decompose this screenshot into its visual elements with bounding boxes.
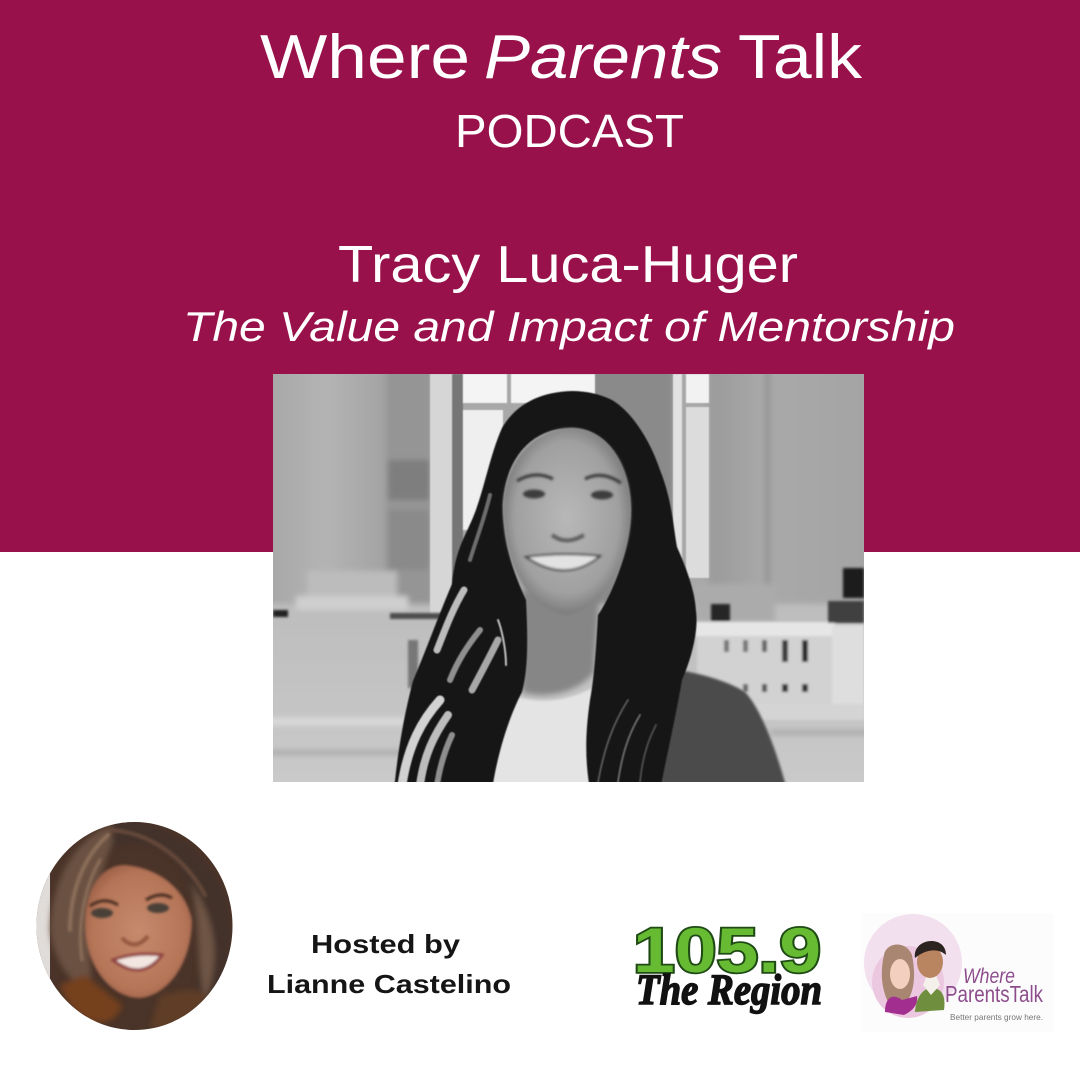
subtitle: PODCAST: PODCAST	[455, 105, 684, 157]
hair	[394, 391, 697, 790]
logo: 105.9 The Region	[633, 916, 822, 1014]
neck	[522, 590, 600, 695]
host face	[85, 865, 192, 998]
logo circles	[864, 914, 962, 1012]
logo woman	[882, 944, 917, 1015]
balustrade	[273, 568, 865, 720]
guest name: Tracy Luca-Huger	[338, 236, 798, 294]
host credit: Hosted by	[311, 929, 461, 959]
logo: 105.9 The Region: The Region	[636, 967, 822, 1014]
logo: Where Parents Talk	[862, 913, 1054, 1032]
logo: 105.9 The Region: 105.9	[633, 916, 821, 986]
logo wordmark: Where	[963, 965, 1015, 988]
guest photo	[265, 366, 875, 790]
shirt	[493, 688, 592, 782]
window panes	[430, 374, 709, 614]
logo wordmark: ParentsTalk	[945, 981, 1043, 1007]
jacket	[661, 670, 786, 782]
title: Where Parents Talk: Talk	[738, 23, 863, 92]
eyes, brows, nose, smile	[517, 475, 621, 570]
host portrait	[36, 822, 232, 1030]
host credit	[267, 929, 511, 999]
maroon header band	[0, 0, 1080, 552]
episode title: The Value and Impact of Mentorship	[183, 303, 955, 350]
face	[503, 428, 631, 615]
title: Where Parents Talk: Parents	[484, 23, 722, 92]
host features	[90, 895, 172, 970]
host credit: Lianne Castelino	[267, 969, 511, 999]
logo man	[915, 941, 946, 1012]
title: Where Parents Talk	[260, 23, 863, 92]
logo: Where Parents Talk: Better parents grow here.	[950, 1012, 1043, 1022]
title: Where Parents Talk: Where	[260, 23, 470, 92]
hair highlights	[402, 495, 656, 785]
logo wordmark	[945, 965, 1043, 1007]
